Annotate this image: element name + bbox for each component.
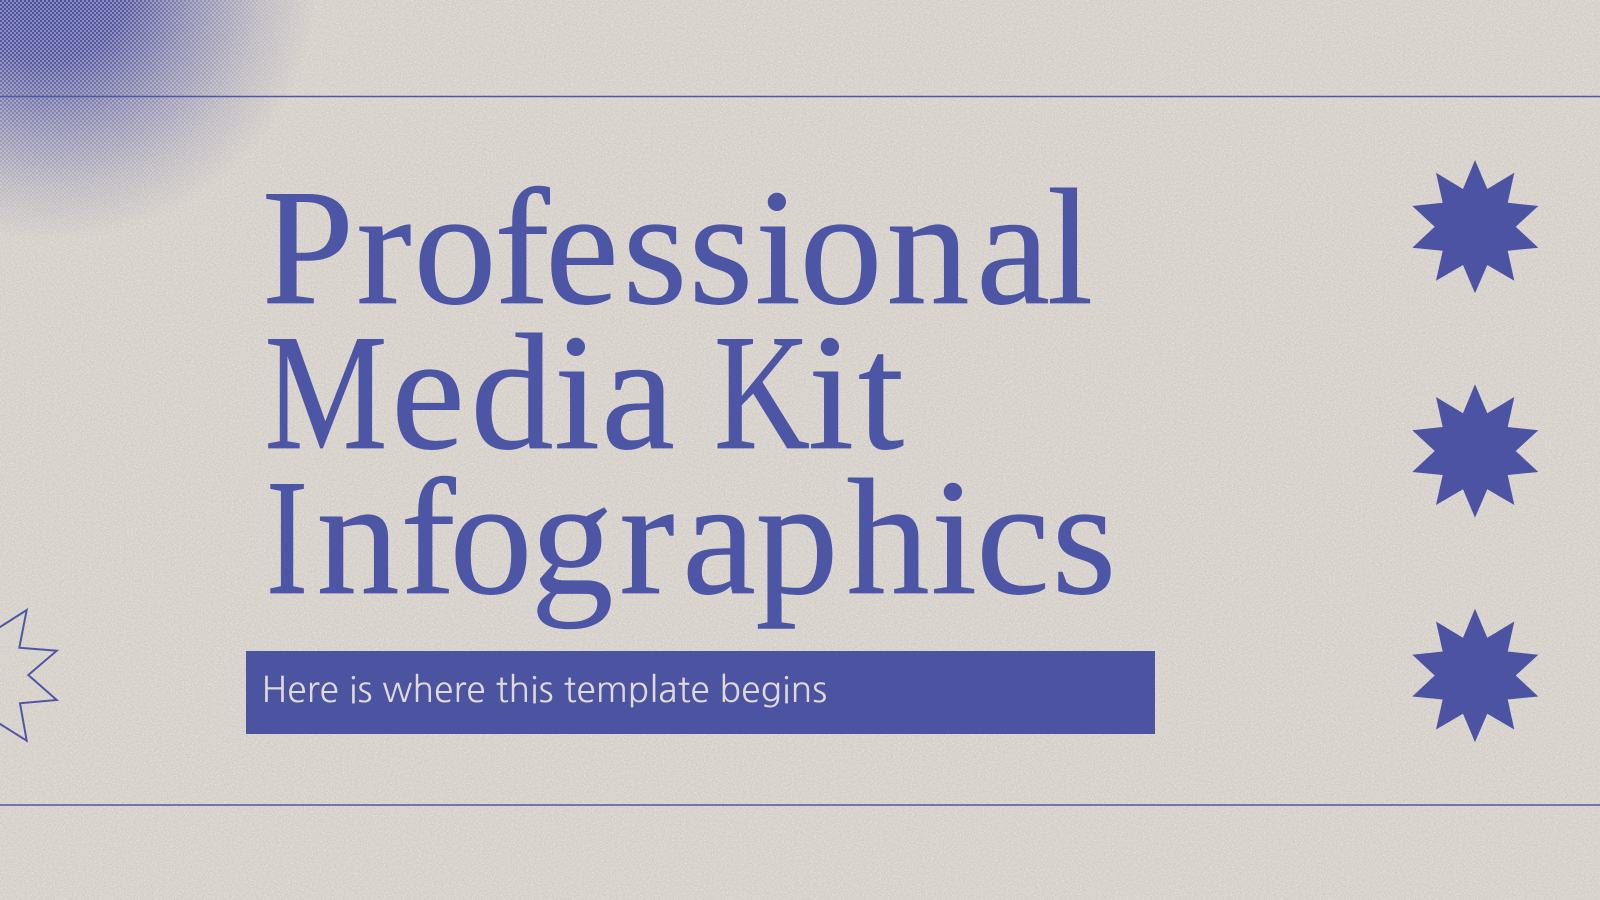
title xyxy=(262,155,1116,629)
halftone gradient corner xyxy=(0,0,300,225)
top rule xyxy=(0,96,1600,98)
title: I xyxy=(266,445,308,629)
title: edia xyxy=(391,300,711,484)
title: M xyxy=(264,300,388,484)
icon: solid star middle xyxy=(1412,384,1538,518)
icon: solid star top xyxy=(1412,160,1538,293)
title: nfographics xyxy=(316,445,1116,629)
title: it xyxy=(808,300,904,484)
title: K xyxy=(714,300,810,484)
icon: outlined star xyxy=(0,610,57,741)
icon: solid star bottom xyxy=(1412,609,1538,742)
subtitle banner: Here is where this template begins xyxy=(262,673,827,708)
subtitle banner xyxy=(246,651,1155,734)
title: Professional xyxy=(262,155,1093,339)
bottom rule xyxy=(0,804,1600,806)
